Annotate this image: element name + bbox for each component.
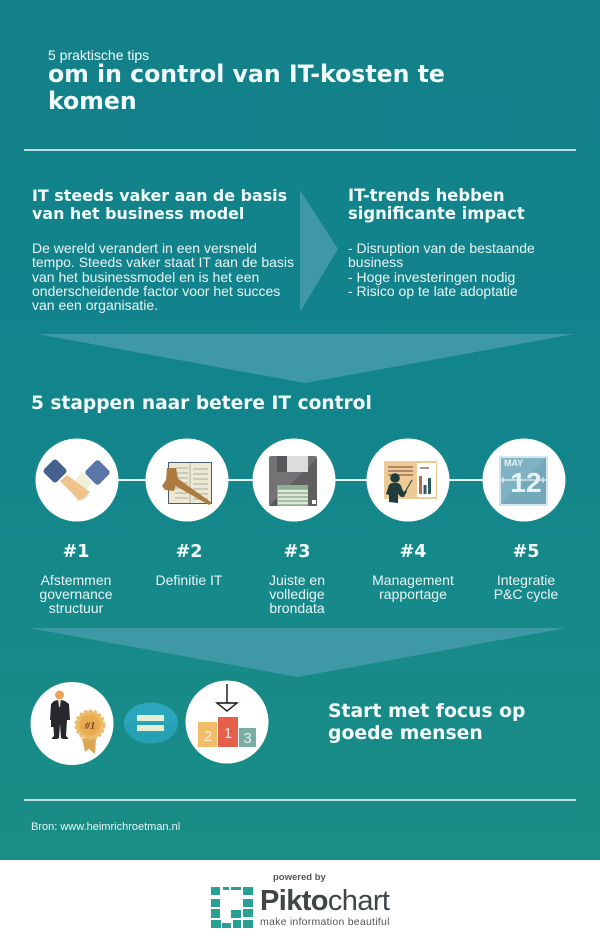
step label: structuur xyxy=(49,600,103,616)
icon: podium with arrow: 2 xyxy=(204,728,212,745)
step label xyxy=(494,572,558,602)
step label: Juiste en xyxy=(269,572,325,588)
left column: business model xyxy=(32,186,294,313)
heading: IT-trends hebben xyxy=(348,186,505,205)
paragraph: onderscheidende factor voor het succes xyxy=(32,283,280,299)
heading: van het business model xyxy=(32,204,244,223)
heading: significante impact xyxy=(348,204,525,223)
subtitle: 5 praktische tips xyxy=(48,47,149,63)
step 4 xyxy=(372,542,454,602)
icon: podium with arrow xyxy=(186,680,268,764)
step label: brondata xyxy=(269,600,325,616)
icon: podium with arrow: 3 xyxy=(243,730,252,747)
heading: IT steeds vaker aan de basis xyxy=(32,186,287,205)
arrow: down banner one xyxy=(37,334,575,383)
main title: komen xyxy=(48,87,137,115)
paragraph: De wereld verandert in een versneld xyxy=(32,240,257,256)
icon: calendar: MAY xyxy=(504,458,523,468)
step label xyxy=(39,572,113,616)
main title xyxy=(48,60,445,115)
step label: Definitie IT xyxy=(156,572,222,588)
step number: #3 xyxy=(284,542,310,562)
paragraph xyxy=(32,240,294,313)
icon: businessman with rosette xyxy=(30,682,114,765)
step 2 xyxy=(156,542,222,588)
bullet list: - Hoge investeringen nodig xyxy=(348,269,515,285)
step label: P&C cycle xyxy=(494,586,558,602)
source: Bron: www.heimrichroetman.nl xyxy=(31,821,180,833)
step label: governance xyxy=(39,586,113,602)
icon: presentation xyxy=(366,438,450,522)
callout text xyxy=(328,701,525,744)
main title: om in control van IT-kosten te xyxy=(48,60,445,88)
bullet list: business xyxy=(348,254,403,270)
footer: brand name: Piktochart xyxy=(260,885,389,917)
step 3 xyxy=(269,542,325,616)
icon: businessman with rosette: #1 xyxy=(84,720,96,732)
bullet list: - Risico op te late adoptatie xyxy=(348,283,518,299)
step label xyxy=(372,572,454,602)
callout text: Start met focus op xyxy=(328,701,525,722)
paragraph: van een organisatie. xyxy=(32,297,158,313)
step label: Integratie xyxy=(497,572,555,588)
icon: calendar xyxy=(482,438,566,522)
step 1 xyxy=(39,542,113,616)
step label: volledige xyxy=(269,586,325,602)
arrow: down banner two xyxy=(29,628,566,677)
bullet list xyxy=(348,240,535,299)
step number: #2 xyxy=(176,542,202,562)
footer: powered by: powered by xyxy=(273,872,326,883)
section heading: 5 stappen naar betere IT control xyxy=(31,393,372,414)
logo: Piktochart mark xyxy=(211,887,253,928)
icon: law book and gavel xyxy=(146,438,228,522)
equals sign badge xyxy=(124,702,178,744)
callout text: goede mensen xyxy=(328,723,483,744)
step label xyxy=(269,572,325,616)
icon: calendar: 12 xyxy=(510,467,542,498)
step 5 xyxy=(494,542,558,602)
icon: floppy disk xyxy=(252,438,336,522)
icon: podium with arrow: 1 xyxy=(224,725,232,742)
heading xyxy=(348,186,525,223)
arrow: right chevron xyxy=(300,190,338,312)
step label: rapportage xyxy=(379,586,447,602)
title block xyxy=(48,47,445,115)
paragraph: van het businessmodel en is het een xyxy=(32,269,259,285)
step number: #5 xyxy=(513,542,539,562)
right column: trends xyxy=(348,186,535,299)
step label: Afstemmen xyxy=(41,572,111,588)
step number: #1 xyxy=(63,542,89,562)
step label: Management xyxy=(372,572,454,588)
heading xyxy=(32,186,287,223)
footer: tagline: make information beautiful xyxy=(260,916,390,928)
paragraph: tempo. Steeds vaker staat IT aan de basis xyxy=(32,254,294,270)
icon: handshake xyxy=(36,438,118,522)
step number: #4 xyxy=(400,542,426,562)
bullet list: - Disruption van de bestaande xyxy=(348,240,535,256)
step connector line xyxy=(110,479,490,481)
